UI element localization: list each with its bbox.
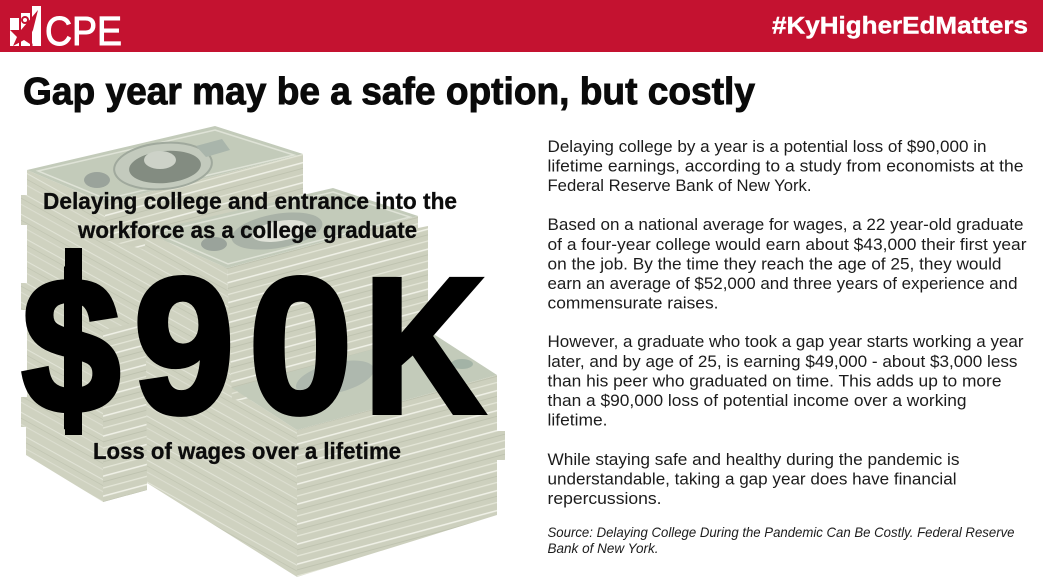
paragraph 3: than his peer who graduated on time. This adds up to more (548, 372, 1002, 390)
source note (548, 525, 1015, 556)
illustration: stacks of dollar bills (21, 126, 505, 577)
paragraph 2: of a four-year college would earn about $43,000 their first year (548, 236, 1027, 254)
paragraph 2 (548, 216, 1027, 312)
paragraph 1 (548, 138, 1024, 195)
icon: rising bars with star figure (10, 6, 41, 46)
hashtag: #KyHigherEdMatters (772, 12, 1028, 40)
paragraph 2: on the job. By the time they reach the age of 25, they would (548, 256, 1002, 274)
logo wordmark: CPE (45, 8, 122, 54)
source note: Source: Delaying College During the Pandemic Can Be Costly. Federal Reserve (548, 525, 1015, 540)
paragraph 4 (548, 451, 960, 508)
big figure: $90K: K (364, 238, 484, 453)
middle and front stack (145, 188, 505, 577)
paragraph 2: earn an average of $52,000 and three years of experience and (548, 275, 1018, 293)
paragraph 3: later, and by age of 25, is earning $49,000 - about $3,000 less (548, 353, 1018, 371)
paragraph 1: Delaying college by a year is a potential loss of $90,000 in (548, 138, 986, 156)
callout caption: Loss of wages over a lifetime (93, 438, 401, 464)
callout heading: Delaying college and entrance into the (43, 188, 457, 214)
left stack (21, 126, 303, 502)
title: Gap year may be a safe option, but costly (23, 71, 755, 113)
paragraph 1: Federal Reserve Bank of New York. (548, 177, 812, 195)
bill portrait (112, 139, 214, 193)
paragraph 2: Based on a national average for wages, a 22 year-old graduate (548, 216, 1024, 234)
paragraph 3 (548, 333, 1024, 430)
paragraph 4: understandable, taking a gap year does have financial (548, 470, 956, 488)
callout heading (43, 188, 457, 243)
paragraph 3: lifetime. (548, 412, 608, 430)
paragraph 3: than a $90,000 loss of potential income over a working (548, 392, 966, 410)
paragraph 1: lifetime earnings, according to a study from economists at the (548, 158, 1024, 176)
CPE logo (10, 6, 122, 54)
big figure: $90K: 9 (134, 238, 234, 453)
big figure: $90K (22, 238, 484, 453)
paragraph 4: repercussions. (548, 490, 662, 508)
callout heading: workforce as a college graduate (77, 217, 417, 243)
big figure: $90K: 0 (249, 238, 352, 453)
paragraph 4: While staying safe and healthy during the pandemic is (548, 451, 960, 469)
paragraph 2: commensurate raises. (548, 294, 718, 312)
source note: Bank of New York. (548, 541, 658, 556)
header band (0, 0, 1043, 52)
big figure: $90K: $ (22, 238, 120, 453)
paragraph 3: However, a graduate who took a gap year starts working a year (548, 333, 1024, 351)
